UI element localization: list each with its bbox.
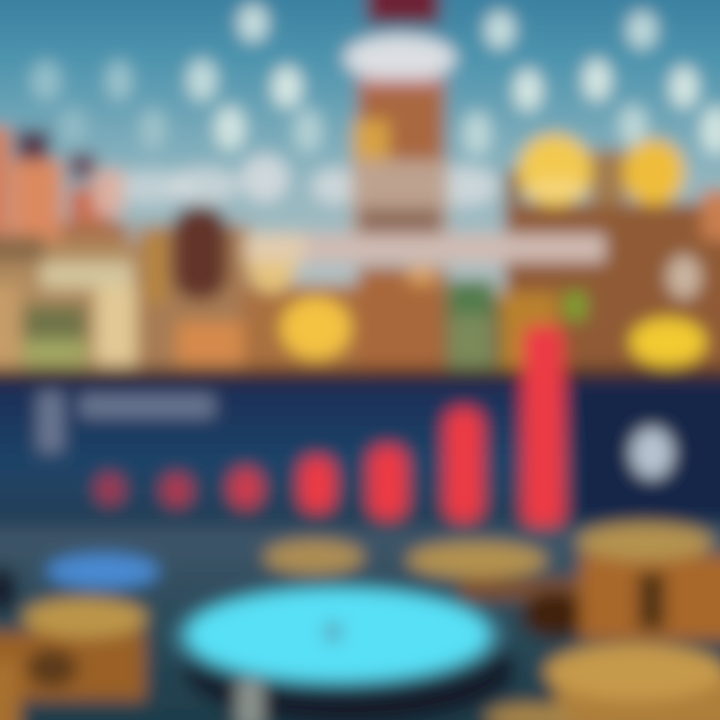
dark right panel [574, 385, 720, 520]
floor [0, 528, 720, 720]
sky background [0, 0, 720, 300]
chart heading text block [38, 392, 214, 452]
orange column [498, 292, 558, 370]
navy chart panel [0, 380, 720, 530]
red top of tallest bar over ground line [527, 335, 562, 395]
cloud band upper [105, 154, 499, 206]
ground line [0, 368, 720, 380]
cyan central disc [172, 583, 515, 720]
left orange buildings [0, 127, 130, 252]
left ground and cream arch building [0, 235, 140, 370]
bar chart [96, 325, 564, 526]
chocolate pillar [172, 205, 228, 300]
orange block [177, 322, 243, 364]
snowflake dots [31, 4, 720, 155]
gold coin stacks [0, 523, 720, 720]
yellow domes [248, 134, 706, 366]
green column [447, 280, 495, 370]
small blue ellipse [47, 554, 159, 588]
base of the middle scene [138, 190, 720, 370]
banner left edge [245, 234, 305, 262]
white dot icon [631, 428, 673, 478]
central tower [344, 0, 456, 234]
golden highlight under banner [406, 265, 438, 285]
lower cream banner [305, 234, 605, 262]
green leaf [565, 292, 586, 320]
